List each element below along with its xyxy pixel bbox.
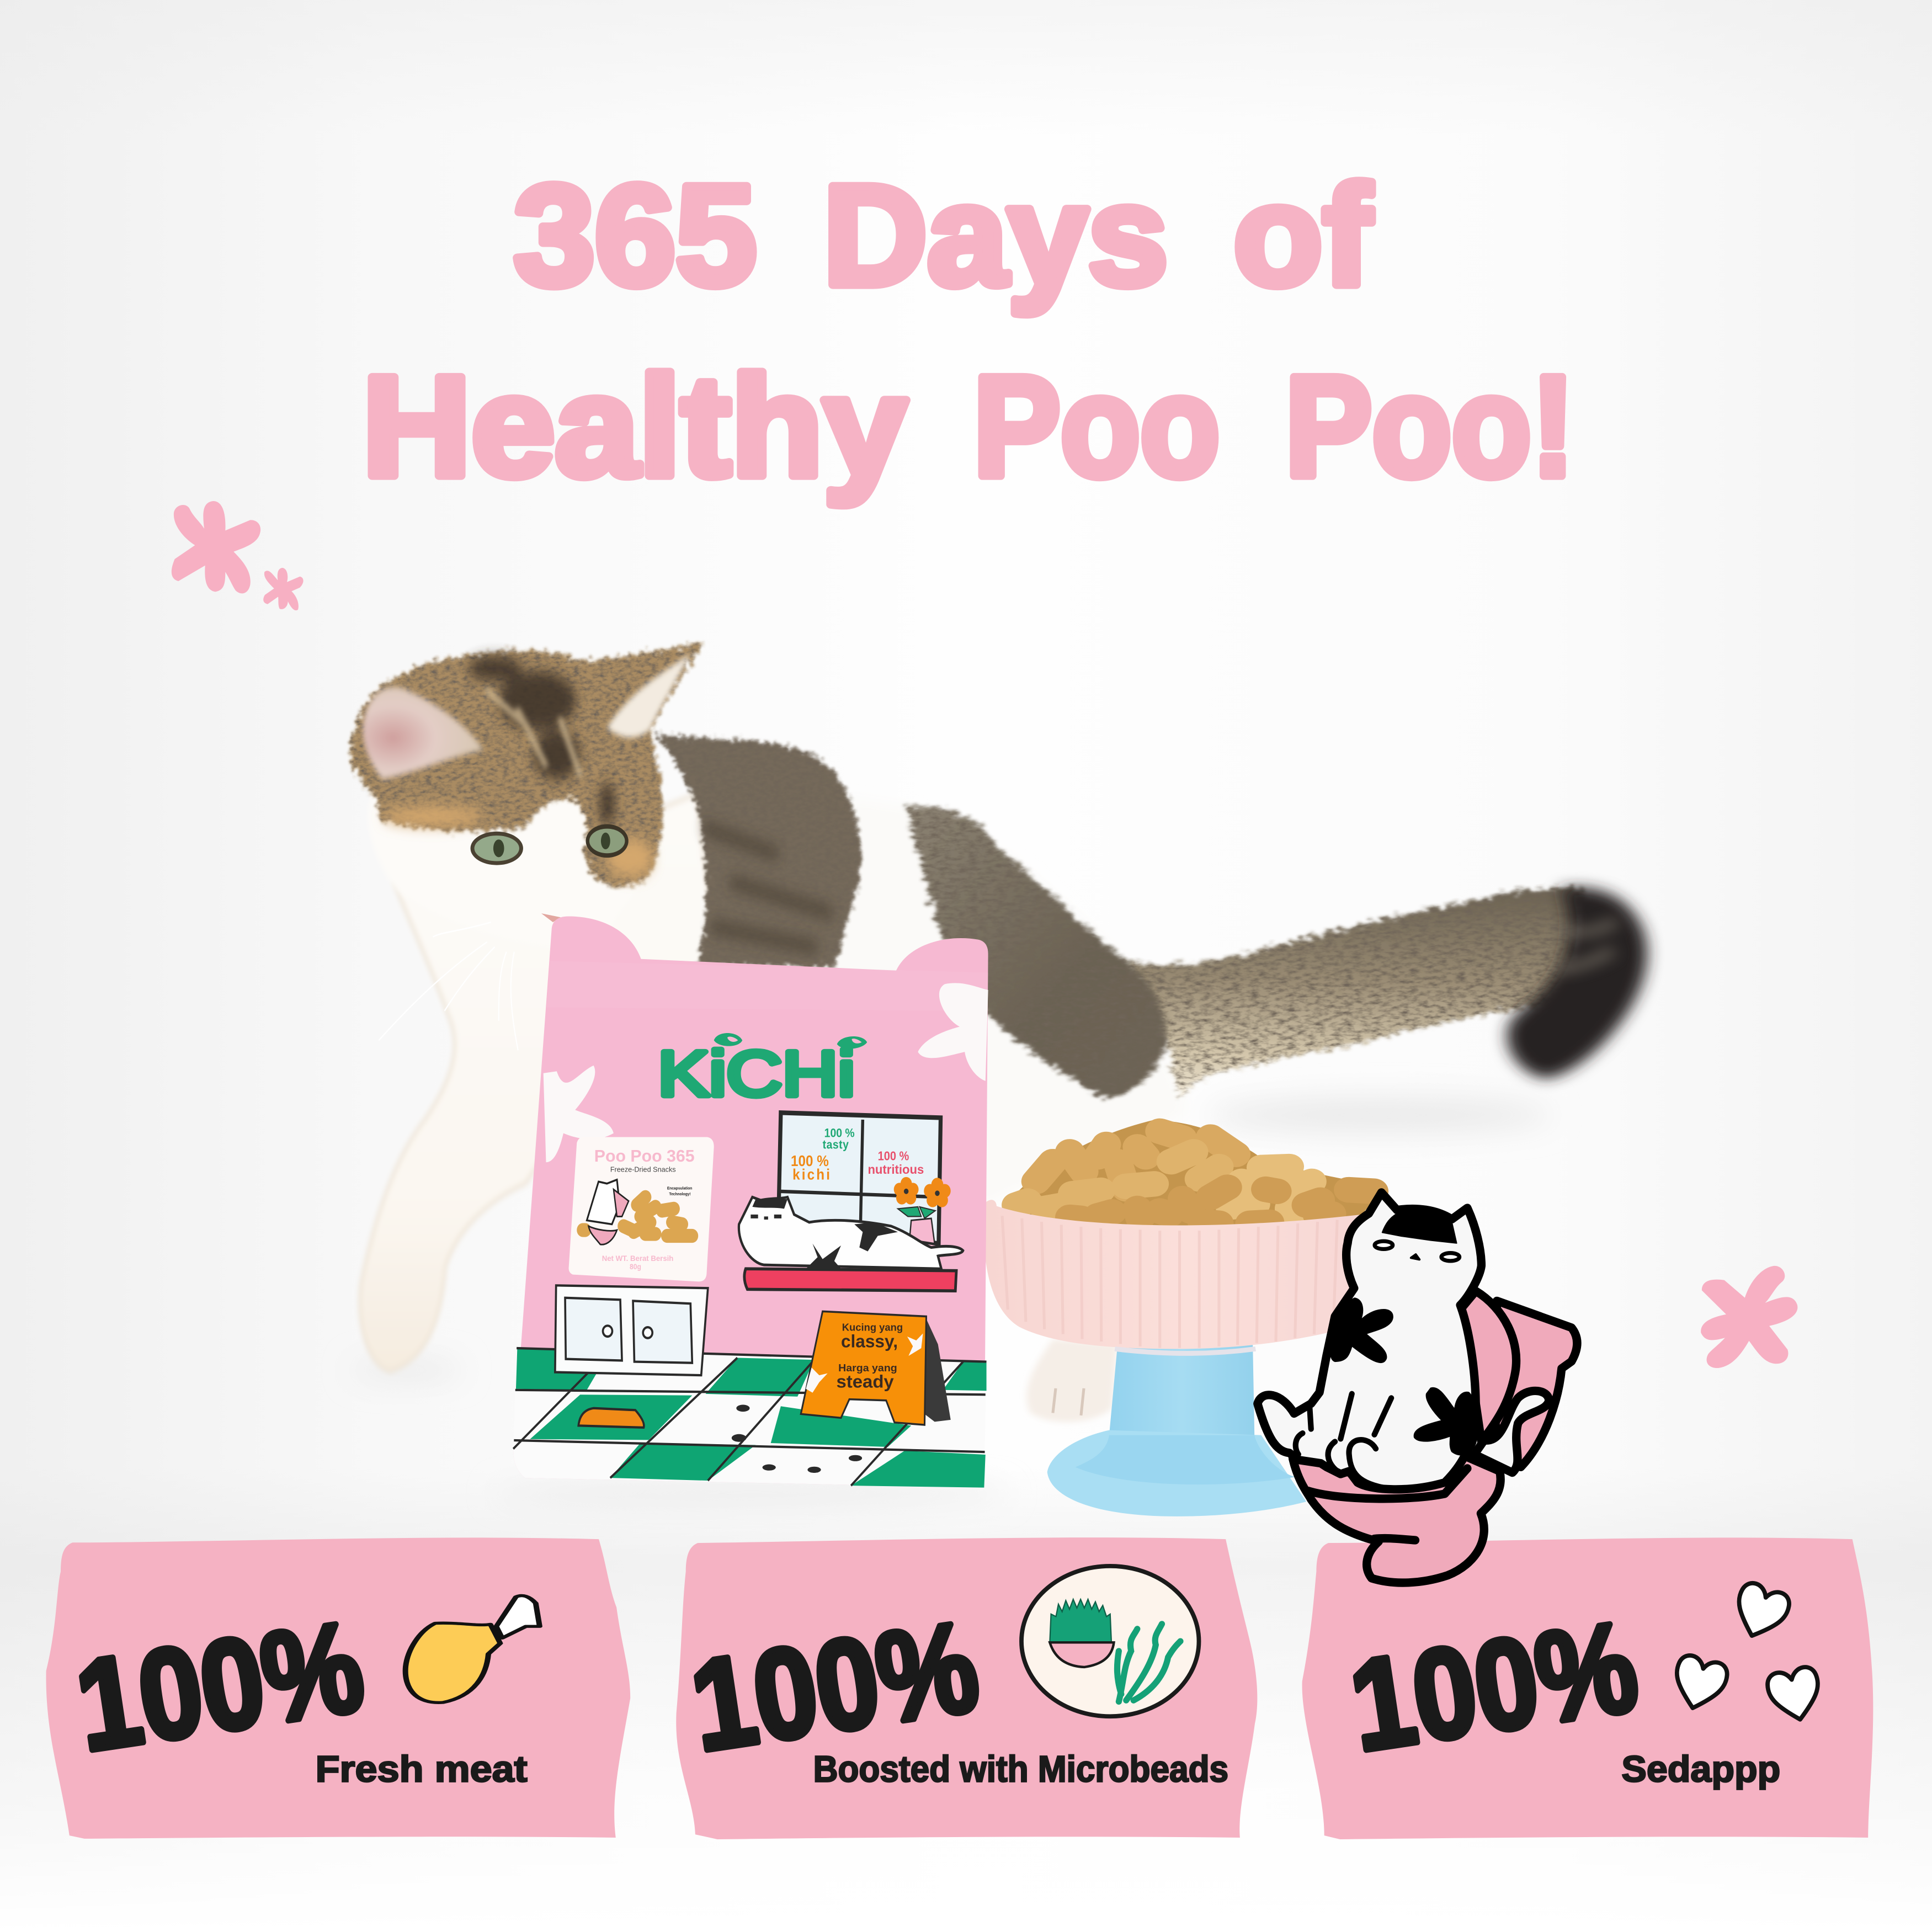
forehead light stripes (487, 691, 580, 774)
panel 1 label: Fresh meat (316, 1749, 528, 1790)
rear white body (771, 787, 1188, 1206)
panel 2 label: Boosted with Microbeads (813, 1749, 1228, 1790)
panel 3 percent: 100% (1342, 1595, 1646, 1778)
title word 365: 365 (514, 156, 757, 315)
sign text 3: Harga yang (838, 1362, 897, 1374)
cat spot hip (1414, 1388, 1477, 1455)
title word Poo!: Poo! (1285, 347, 1574, 506)
label weight: Net WT. Berat Bersih (602, 1254, 673, 1263)
cat front group (349, 642, 861, 1371)
sign front (801, 1311, 926, 1425)
panel 3 background (1302, 1537, 1873, 1839)
cat hair (1382, 1210, 1457, 1243)
cat face (751, 1215, 781, 1220)
bowl ribs (1002, 1216, 1337, 1348)
heart right (1765, 1665, 1825, 1725)
sign back (924, 1315, 951, 1422)
label grams: 80g (630, 1262, 641, 1271)
cat bowl (578, 1408, 644, 1428)
logo (658, 1033, 867, 1109)
logo text: KiCHi (658, 1038, 855, 1109)
cat spot shoulder (1330, 1298, 1393, 1362)
title word Poo: Poo (973, 347, 1220, 506)
orange cheek patch (382, 806, 653, 878)
vase (909, 1218, 935, 1244)
sign text 2: classy, (841, 1332, 898, 1351)
chest and front leg (360, 794, 716, 1371)
bag body (513, 917, 988, 1488)
wheatgrass (1050, 1599, 1111, 1642)
cat hair (752, 1199, 787, 1209)
kibble back (1002, 1120, 1385, 1227)
flower small (263, 568, 304, 610)
window tasty: 100 % (824, 1126, 855, 1140)
heart left (1668, 1653, 1730, 1715)
label mini toilet (588, 1189, 629, 1244)
window bars (779, 1120, 940, 1232)
leaves (898, 1207, 935, 1218)
cat eyes (1375, 1241, 1460, 1261)
panel 2 percent: 100% (683, 1595, 987, 1778)
hip patch (907, 806, 1167, 1098)
flower large (172, 501, 260, 593)
panel 1 percent: 100% (68, 1595, 372, 1778)
cat silhouette (739, 1197, 963, 1269)
flower right (1686, 1260, 1811, 1381)
stat panel 3 (1302, 1537, 1873, 1839)
pot (1050, 1642, 1114, 1667)
bowl cup (983, 1200, 1391, 1349)
floor tiles (516, 1348, 987, 1488)
paw prints (732, 1404, 862, 1473)
label mini cat (587, 1180, 620, 1224)
product bag (513, 917, 988, 1488)
lounging cat (739, 1197, 963, 1269)
paw toe lines (1053, 1388, 1084, 1415)
window kichi: 100 % (791, 1152, 829, 1170)
floor grid lines (513, 1348, 987, 1486)
rear paw (1026, 1339, 1117, 1422)
sign (801, 1311, 951, 1425)
red cushion (744, 1269, 956, 1291)
window nutritious 2: nutritious (867, 1162, 924, 1177)
orange flower right (924, 1178, 951, 1207)
icon: drumstick (406, 1595, 540, 1702)
neck shoulder patch (653, 732, 861, 967)
cabinet (555, 1285, 708, 1375)
window nutritious: 100 % (878, 1148, 909, 1163)
pink bowl with kibble (983, 1120, 1391, 1516)
heart top (1728, 1580, 1793, 1644)
illustrated cat on toilet (1258, 1193, 1577, 1583)
stat panel 1 (46, 1537, 630, 1839)
white flower left (544, 1066, 614, 1162)
base glaze shade (1076, 1435, 1295, 1484)
flowers in vase (894, 1177, 951, 1244)
cat tail (1475, 1391, 1549, 1473)
icon: microbeads (1021, 1566, 1199, 1716)
cat nose (1411, 1254, 1419, 1259)
orange flower left (894, 1177, 919, 1205)
seaweed (1117, 1624, 1180, 1701)
shoulder patch dark stripes (708, 829, 828, 947)
tail body (1123, 887, 1582, 1098)
cat spots (806, 1222, 898, 1269)
sign text 4: steady (836, 1372, 894, 1392)
window (779, 1113, 941, 1244)
whiskers (379, 922, 518, 1050)
stat panel 2 (676, 1537, 1257, 1839)
logo i-dots (714, 1033, 867, 1049)
head base white (349, 642, 704, 947)
decorative flowers (172, 501, 1811, 1381)
wall and floor shadows (351, 1098, 1552, 1503)
blue base (1047, 1430, 1306, 1516)
title word of: of (1233, 156, 1373, 315)
panel 2 background (676, 1537, 1257, 1839)
sign white flower bottom (806, 1367, 828, 1393)
title (362, 156, 1574, 507)
cat rear group (771, 787, 1647, 1422)
cat nose (541, 913, 561, 922)
floor (513, 1348, 987, 1488)
top seal highlight (547, 961, 988, 1011)
left ear (363, 687, 483, 779)
right ear (607, 654, 690, 737)
window kichi 2: kichi (792, 1165, 830, 1183)
sign white flower top (907, 1333, 923, 1356)
sign text 1: Kucing yang (842, 1322, 903, 1333)
photo: cat (349, 642, 1647, 1503)
label callout: Encapsulation (667, 1185, 692, 1190)
icon: hearts (1668, 1580, 1825, 1725)
panel 1 background (46, 1537, 630, 1839)
toilet lid (1462, 1291, 1516, 1441)
cat leg lines (1296, 1394, 1394, 1489)
label kibble (583, 1197, 692, 1236)
head tabby fur (349, 642, 704, 886)
window frame (779, 1113, 941, 1244)
title word Days: Days (823, 156, 1168, 316)
product label (569, 1137, 714, 1281)
forehead dark stripes (468, 656, 615, 826)
label subtitle: Freeze-Dried Snacks (610, 1165, 676, 1174)
window tasty 2: tasty (823, 1138, 849, 1152)
title word Healthy: Healthy (362, 347, 908, 507)
icon circle (1021, 1566, 1199, 1716)
blue stand column (1109, 1344, 1254, 1435)
label title: Poo Poo 365 (594, 1147, 695, 1165)
label card (569, 1137, 714, 1281)
tail tip light bands (1560, 920, 1616, 970)
cat body (1258, 1193, 1481, 1489)
bowl rim line (1308, 1468, 1467, 1540)
bowl foot ring (1115, 1349, 1255, 1353)
white flower right (918, 983, 988, 1081)
kibble pieces (1016, 1131, 1374, 1223)
toilet tank (1495, 1301, 1577, 1467)
cat eyes (471, 824, 629, 865)
tail tip (1507, 887, 1647, 1078)
label callout 2: Technology! (669, 1191, 691, 1196)
panel 3 label: Sedappp (1621, 1749, 1780, 1790)
toilet bowl (1293, 1457, 1500, 1583)
